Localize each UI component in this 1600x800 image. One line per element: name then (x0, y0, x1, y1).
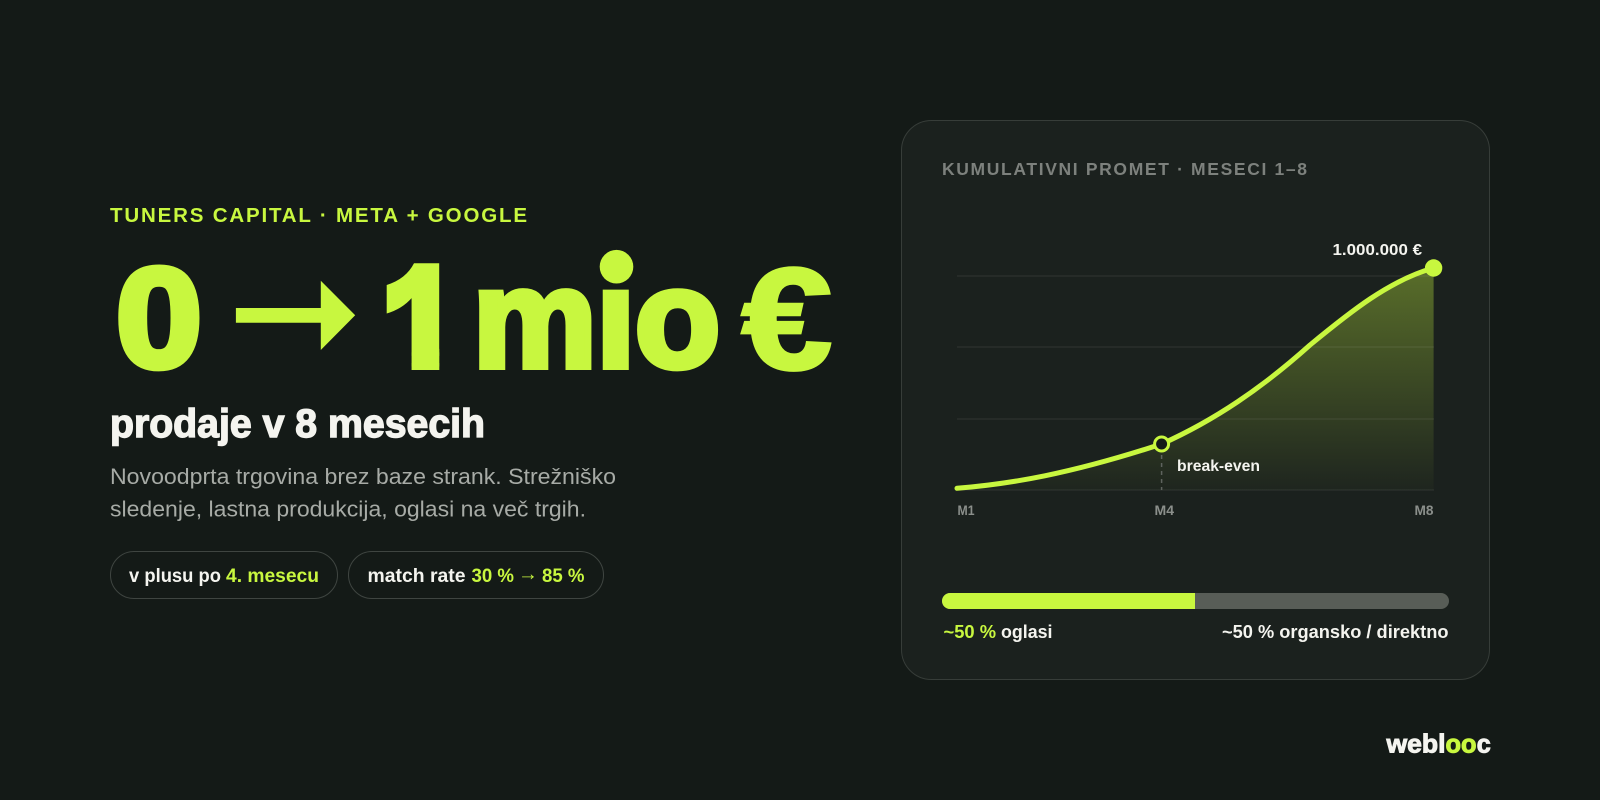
logo: weblooc: oo (1446, 728, 1476, 758)
revenue curve (957, 268, 1434, 488)
subheading: prodaje v 8 mesecih (110, 402, 485, 446)
headline euro sign: € (742, 238, 832, 400)
pill: match rate: match rate (368, 565, 466, 587)
traffic split bar (942, 593, 1449, 609)
chart area fill (957, 268, 1434, 490)
split label: ads: ~50 % (944, 622, 996, 642)
logo: weblooc: webl (1385, 728, 1446, 758)
description text: Novoodprta trgovina brez baze strank. Strežniško (110, 464, 616, 489)
logo: weblooc: c (1477, 728, 1491, 758)
pill: match rate: → (518, 563, 538, 585)
line chart (957, 242, 1442, 518)
headline mio: mio (473, 242, 720, 396)
description text: sledenje, lastna produkcija, oglasi na več trgih. (110, 496, 586, 522)
panel: cumulative revenue card (902, 120, 1490, 680)
x-axis labels: M1 (958, 502, 975, 518)
value label: one million euro: 1.000.000 € (1332, 242, 1422, 259)
pill: profitable after month 4 (110, 552, 338, 598)
pill: match rate (348, 552, 604, 598)
split label: organic and direct: ~50 % organsko / direktno (1222, 622, 1448, 642)
eyebrow label: TUNERS CAPITAL · META + GOOGLE (110, 204, 527, 227)
break-even dashed guide (1161, 455, 1163, 490)
pill: match rate: 85 % (542, 565, 584, 587)
split label: ads: oglasi (1001, 622, 1052, 642)
card title: KUMULATIVNI PROMET · MESECI 1–8 (942, 159, 1307, 179)
headline one: 1 (380, 242, 458, 396)
pill: profitable after month 4: 4. mesecu (226, 565, 319, 587)
pill: profitable after month 4: v plusu po (129, 565, 221, 587)
break-even label: break-even (1177, 458, 1260, 475)
description text (110, 464, 616, 522)
x-axis labels: M4 (1154, 502, 1174, 518)
headline one (386, 263, 440, 370)
pill: match rate: 30 % (472, 565, 514, 587)
break-even marker (1155, 437, 1169, 451)
headline zero: 0 (116, 238, 202, 396)
headline arrow (236, 281, 355, 350)
x-axis labels: M8 (1414, 502, 1434, 518)
end point marker (1425, 259, 1442, 277)
headline: 0 to 1 mio euro (118, 250, 832, 372)
x-axis labels (958, 502, 1434, 518)
